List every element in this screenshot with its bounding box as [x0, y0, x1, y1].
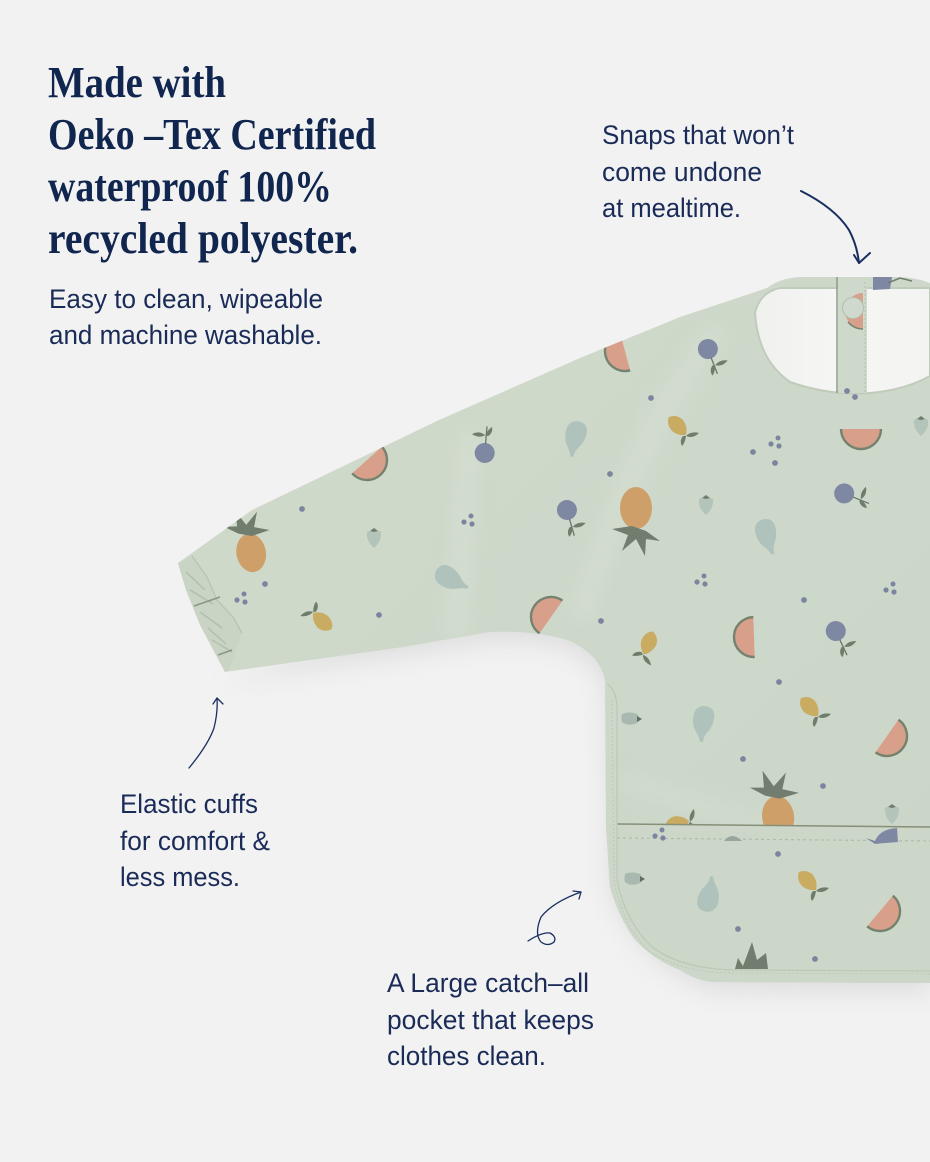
- title: Oeko –Tex Certified: [48, 110, 376, 159]
- pocket stitching: [617, 838, 930, 841]
- subtitle: and machine washable.: [49, 320, 322, 350]
- callout: elastic cuffs: for comfort &: [120, 826, 270, 856]
- callout: pocket: clothes clean.: [387, 1041, 546, 1071]
- title: [48, 58, 376, 263]
- callout: snaps: [602, 120, 794, 223]
- pears: [431, 420, 784, 743]
- watermelons: [352, 332, 915, 764]
- snap strap: [838, 279, 867, 393]
- title: Made with: [48, 58, 226, 107]
- subtitle: Easy to clean, wipeable: [49, 284, 323, 314]
- subtitle: [49, 284, 323, 350]
- callout: elastic cuffs: [120, 789, 270, 892]
- plums: [464, 337, 877, 660]
- callout: snaps: come undone: [602, 157, 762, 187]
- fruit pattern: pocket: [624, 828, 908, 969]
- fruit pattern: upper bib and sleeve: [222, 332, 928, 842]
- callout: pocket: pocket that keeps: [387, 1005, 594, 1035]
- callout: snaps: at mealtime.: [602, 193, 741, 223]
- callout: pocket: A Large catch–all: [387, 968, 589, 998]
- callout: elastic cuffs: Elastic cuffs: [120, 789, 258, 819]
- bib body: [178, 277, 930, 983]
- arrow: to cuff: [189, 698, 223, 768]
- title: waterproof 100%: [48, 162, 332, 211]
- callout: elastic cuffs: less mess.: [120, 862, 240, 892]
- snap with printed watermelon: [842, 293, 864, 329]
- fabric folds: [455, 330, 930, 880]
- bib shadow: [225, 560, 930, 993]
- callout: snaps: Snaps that won’t: [602, 120, 794, 150]
- collar plum print: [873, 277, 892, 290]
- arrow: to snaps: [801, 191, 870, 263]
- lemons: [299, 416, 831, 842]
- arrow: to pocket: [528, 891, 581, 944]
- pineapples: [222, 487, 805, 841]
- pocket: [606, 684, 930, 983]
- strawberries: [367, 416, 928, 824]
- illustration: sleeved bib: [178, 277, 930, 983]
- berries and dots: [234, 395, 897, 789]
- pocket opening seam: [617, 824, 930, 827]
- neck opening: [755, 277, 930, 400]
- bib edge binding: [607, 684, 930, 971]
- callout: pocket: [387, 968, 594, 1071]
- title: recycled polyester.: [48, 214, 358, 263]
- elastic cuff: [178, 556, 242, 672]
